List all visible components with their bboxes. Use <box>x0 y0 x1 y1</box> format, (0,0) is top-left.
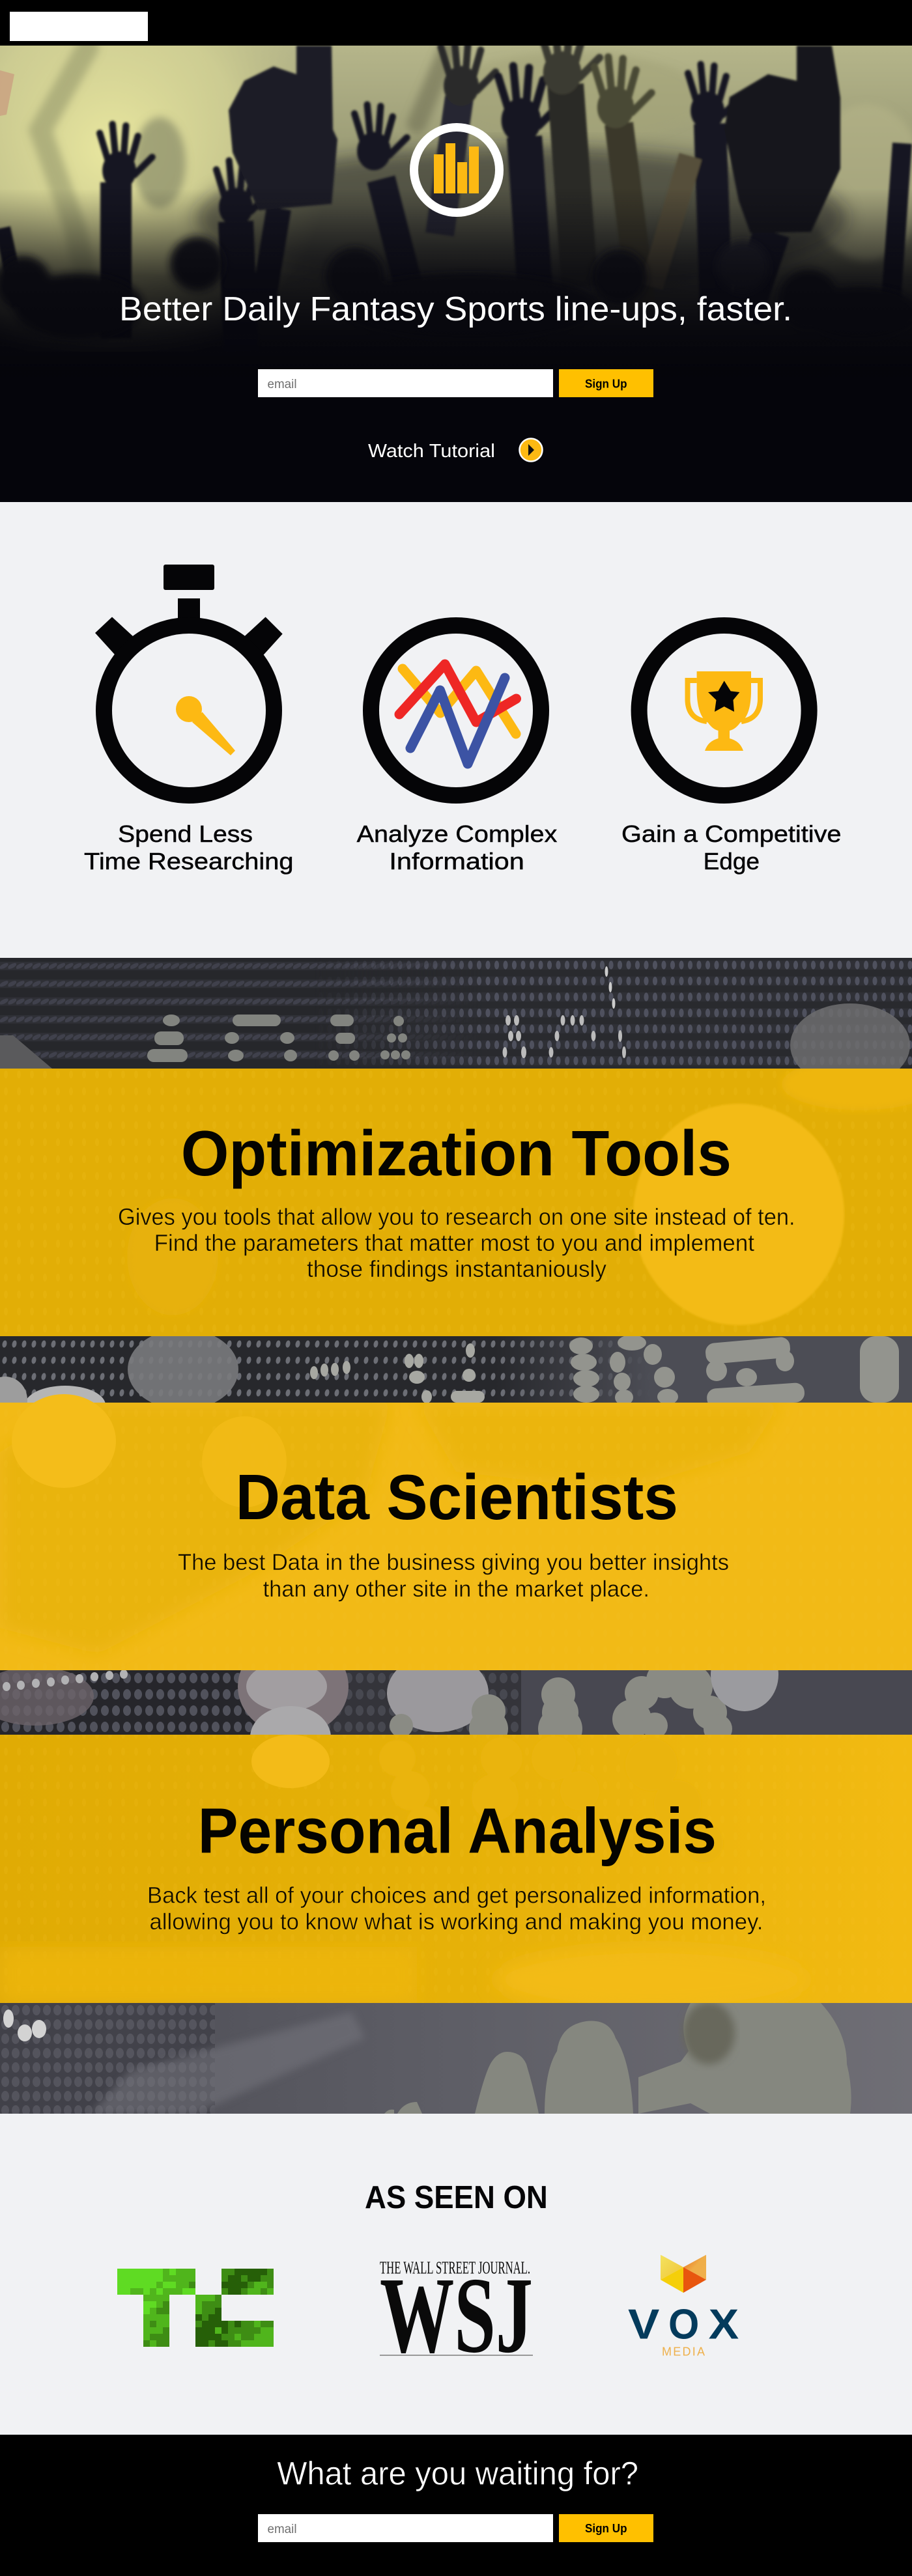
panel: optimization tools <box>0 1058 912 1336</box>
label: gain a competitive edge: Edge <box>704 848 760 875</box>
logo: The Wall Street Journal: WSJ <box>380 2256 533 2375</box>
footer heading: What are you waiting for? <box>277 2455 638 2491</box>
panel: personal analysis <box>0 1735 912 2012</box>
top navigation bar <box>0 0 912 46</box>
logo icon: bar chart in ring <box>414 128 499 212</box>
footer signup form <box>258 2514 653 2542</box>
photo band 1 <box>0 958 912 1069</box>
logo: Vox Media <box>628 2255 739 2359</box>
body text: Find the parameters that matter most to you and implement <box>154 1229 754 1256</box>
body text <box>178 1550 729 1602</box>
photo band 2 <box>0 1336 912 1403</box>
logo: Vox Media: X <box>709 2301 739 2348</box>
label: analyze complex information <box>357 820 557 875</box>
logo: Vox Media: MEDIA <box>662 2345 705 2359</box>
email input: email <box>267 378 297 391</box>
heading: Data Scientists <box>236 1461 678 1533</box>
label: gain a competitive edge: Gain a Competitive <box>621 820 842 847</box>
body text: Gives you tools that allow you to research on one site instead of ten. <box>118 1203 795 1230</box>
hero headline: Better Daily Fantasy Sports line-ups, faster. <box>119 290 792 328</box>
sign up button: Sign Up <box>585 2522 627 2535</box>
body text <box>118 1203 795 1282</box>
hero crowd photo <box>0 20 912 502</box>
heading: AS SEEN ON <box>365 2180 548 2215</box>
logo: Vox Media: V <box>628 2301 659 2348</box>
watch tutorial link: Watch Tutorial <box>368 441 495 462</box>
icon: stopwatch <box>95 565 283 796</box>
label: gain a competitive edge <box>621 820 842 875</box>
benefits panel <box>0 502 912 958</box>
label: spend less time researching <box>84 820 293 875</box>
heading: Personal Analysis <box>198 1795 717 1867</box>
body text: Back test all of your choices and get personalized information, <box>147 1883 766 1908</box>
photo band 3 <box>0 1670 912 1735</box>
label: analyze complex information: Analyze Complex <box>357 820 557 847</box>
body text: those findings instantaniously <box>307 1255 606 1282</box>
email input <box>258 2514 553 2542</box>
body text: allowing you to know what is working and making you money. <box>150 1909 763 1935</box>
logo: The Wall Street Journal <box>380 2256 533 2375</box>
panel: data scientists <box>0 1394 912 1670</box>
icon: play button <box>520 439 542 461</box>
label: spend less time researching: Time Researching <box>84 848 293 875</box>
logo: Vox Media: O <box>668 2301 699 2348</box>
label: analyze complex information: Information <box>389 848 524 875</box>
email input <box>258 369 553 397</box>
icon: trophy <box>639 625 809 796</box>
logo: The Wall Street Journal: THE WALL STREET JOURNAL. <box>380 2258 530 2278</box>
email input: email <box>267 2523 297 2536</box>
body text: The best Data in the business giving you better insights <box>178 1550 729 1575</box>
body text <box>147 1883 766 1935</box>
label: spend less time researching: Spend Less <box>118 820 253 847</box>
icon: chart lines <box>371 625 541 796</box>
sign up button <box>559 369 653 397</box>
sign up button: Sign Up <box>585 378 627 391</box>
footer call to action panel <box>0 2435 912 2576</box>
heading: Optimization Tools <box>181 1117 732 1189</box>
photo band 4 <box>0 2002 912 2114</box>
logo placeholder <box>10 12 148 41</box>
signup form <box>258 369 653 397</box>
panel: as seen on <box>0 2114 912 2435</box>
sign up button <box>559 2514 653 2542</box>
body text: than any other site in the market place. <box>263 1576 649 1602</box>
logo: TechCrunch <box>117 2269 274 2347</box>
hero panel <box>0 20 912 502</box>
